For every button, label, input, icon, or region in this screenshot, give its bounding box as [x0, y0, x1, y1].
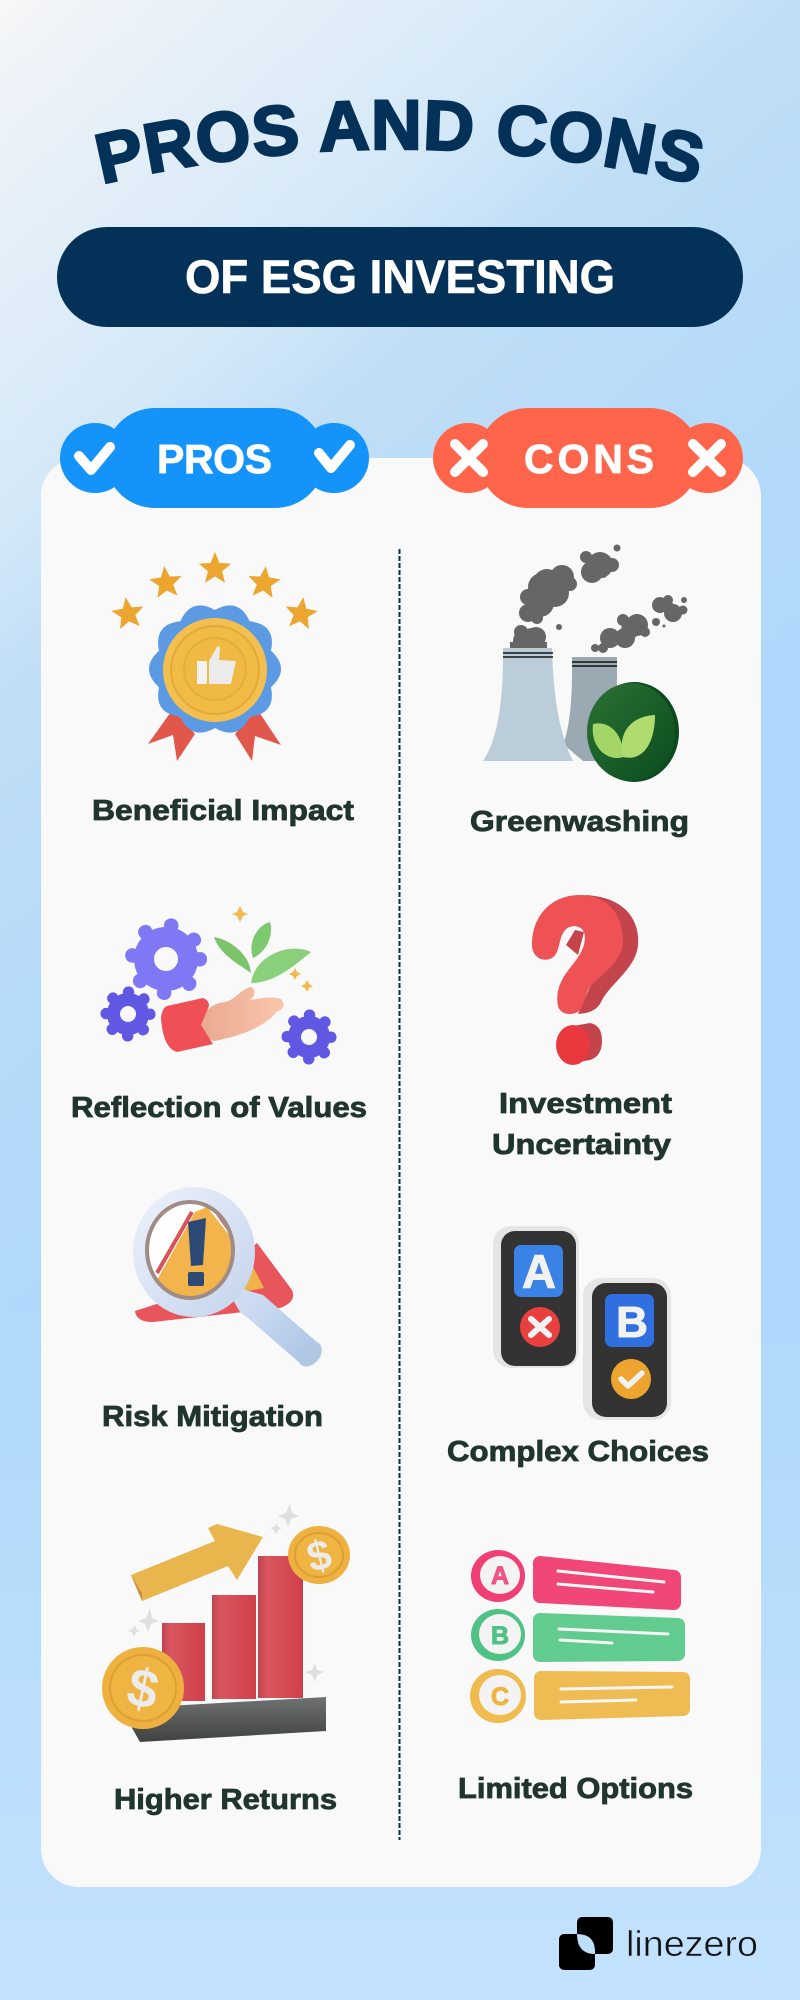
- icon: two phones with A and B choices: B: [616, 1298, 648, 1347]
- icon: rising bar chart with coins: $: [302, 1530, 336, 1581]
- icon: rising bar chart with coins: $: [122, 1657, 164, 1721]
- title: pros and cons arc: PROS AND CONS: [94, 100, 703, 184]
- badge: cons: CONS: [524, 436, 654, 482]
- icon: list of A B C options: B: [491, 1622, 509, 1650]
- label: beneficial impact: Beneficial Impact: [92, 795, 354, 827]
- icon: magnifier with warning sign: [133, 1187, 327, 1371]
- icon: two phones with A and B choices: A: [522, 1245, 556, 1298]
- subtitle pill: [57, 227, 743, 327]
- badge: pros: PROS: [157, 436, 272, 482]
- subtitle pill: OF ESG INVESTING: [185, 250, 615, 303]
- icon: rising bar chart with coins: [102, 1504, 350, 1742]
- icon: factory with green badge: [483, 544, 688, 782]
- icon: hand with gears and leaves: [106, 906, 331, 1059]
- label: complex choices: Complex Choices: [447, 1436, 709, 1468]
- label: greenwashing: Greenwashing: [470, 806, 689, 838]
- icon: list of A B C options: A: [491, 1562, 509, 1590]
- icon: question mark: [532, 895, 638, 1065]
- icon: list of A B C options: [470, 1550, 683, 1723]
- badge: pros: [60, 408, 369, 508]
- label: limited options: Limited Options: [458, 1773, 693, 1805]
- label: higher returns: Higher Returns: [114, 1784, 337, 1816]
- label: investment uncertainty: [492, 1088, 672, 1161]
- label: risk mitigation: Risk Mitigation: [102, 1401, 323, 1433]
- label: investment uncertainty: Investment: [499, 1088, 672, 1120]
- label: reflection of values: Reflection of Values: [71, 1092, 367, 1124]
- icon: list of A B C options: C: [491, 1683, 509, 1711]
- logo: linezero: linezero: [626, 1923, 758, 1964]
- icon: two phones with A and B choices: [493, 1226, 671, 1420]
- label: investment uncertainty: Uncertainty: [492, 1129, 671, 1161]
- badge: cons: [433, 408, 743, 508]
- logo: linezero: [559, 1917, 758, 1970]
- icon: medal with stars: [110, 552, 319, 761]
- panel: content card: [41, 458, 761, 1887]
